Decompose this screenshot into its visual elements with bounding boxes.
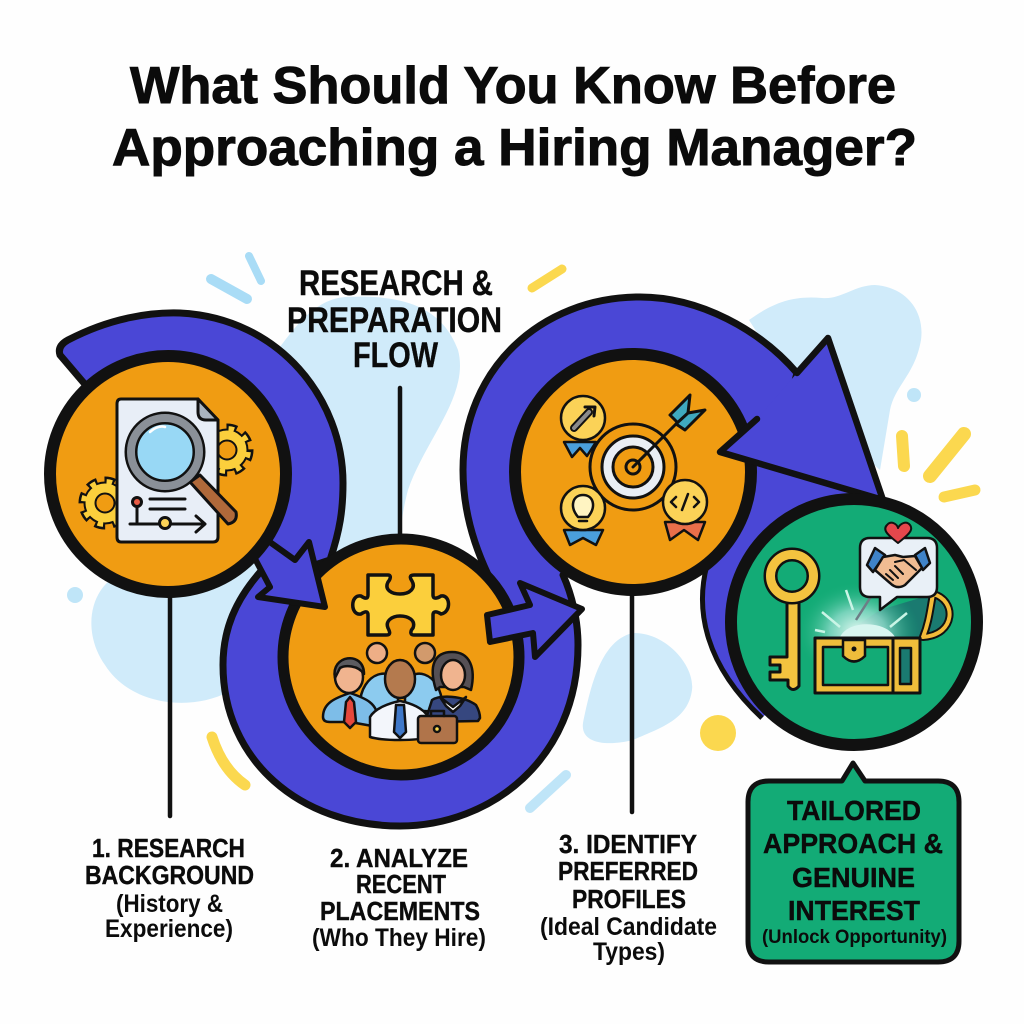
step 3 circle	[515, 354, 751, 590]
icon: gears	[83, 428, 249, 525]
outcome callout: (Unlock Opportunity)	[762, 927, 947, 948]
icon: document	[117, 399, 218, 542]
arrow: step 2 to step 3	[487, 583, 582, 657]
title: Approaching a Hiring Manager?	[112, 119, 917, 177]
purple ribbon from step 1	[59, 313, 343, 570]
flow heading: FLOW	[353, 336, 438, 375]
arrow: big head into step 4	[720, 338, 883, 500]
icon: skill badges	[561, 396, 707, 545]
flow heading	[287, 264, 502, 375]
outcome callout: APPROACH &	[763, 828, 943, 859]
icon: magnifying glass	[131, 418, 236, 524]
outcome callout: INTEREST	[788, 895, 920, 926]
flow heading: PREPARATION	[287, 301, 502, 340]
outcome callout: GENUINE	[792, 862, 915, 893]
icon: puzzle piece	[353, 575, 449, 635]
step 2 label: PLACEMENTS	[320, 896, 480, 926]
step 2 label	[312, 843, 486, 952]
step 1 label: 1. RESEARCH	[92, 833, 245, 863]
decorative sparks	[67, 256, 975, 808]
background blobs	[91, 285, 922, 743]
step 2 circle	[283, 539, 519, 775]
title: What Should You Know Before	[130, 57, 896, 115]
step 1 label: BACKGROUND	[85, 860, 254, 890]
step 1 label: Experience)	[105, 915, 233, 943]
step 3 label: PREFERRED	[558, 856, 698, 886]
step 3 label: PROFILES	[572, 884, 686, 914]
flow heading: RESEARCH &	[299, 264, 493, 303]
outcome callout	[748, 763, 959, 962]
step 2 label: (Who They Hire)	[312, 924, 486, 952]
step 1 circle	[50, 356, 286, 592]
arrow: step 1 to step 2	[253, 540, 325, 607]
title	[112, 57, 917, 177]
leader lines	[170, 388, 632, 816]
step 3 label: Types)	[593, 938, 665, 966]
step 3 label	[540, 829, 717, 966]
outcome callout: TAILORED	[787, 795, 921, 826]
step 1 label: (History &	[116, 890, 223, 918]
step 1 label	[85, 833, 254, 943]
icon: treasure chest with glow	[796, 582, 950, 693]
purple ribbon around step 4	[703, 452, 870, 718]
icon: golden key	[770, 554, 814, 690]
step 4 circle	[731, 499, 977, 745]
icon: hiring team	[323, 643, 480, 743]
icon: target with arrow	[590, 395, 705, 510]
step 2 label: RECENT	[356, 869, 446, 899]
icon: handshake speech bubble	[860, 523, 937, 610]
step 3 label: (Ideal Candidate	[540, 913, 717, 941]
step 2 label: 2. ANALYZE	[330, 843, 468, 873]
step 3 label: 3. IDENTIFY	[559, 829, 697, 859]
purple ribbon through steps 2 and 3	[223, 297, 797, 826]
